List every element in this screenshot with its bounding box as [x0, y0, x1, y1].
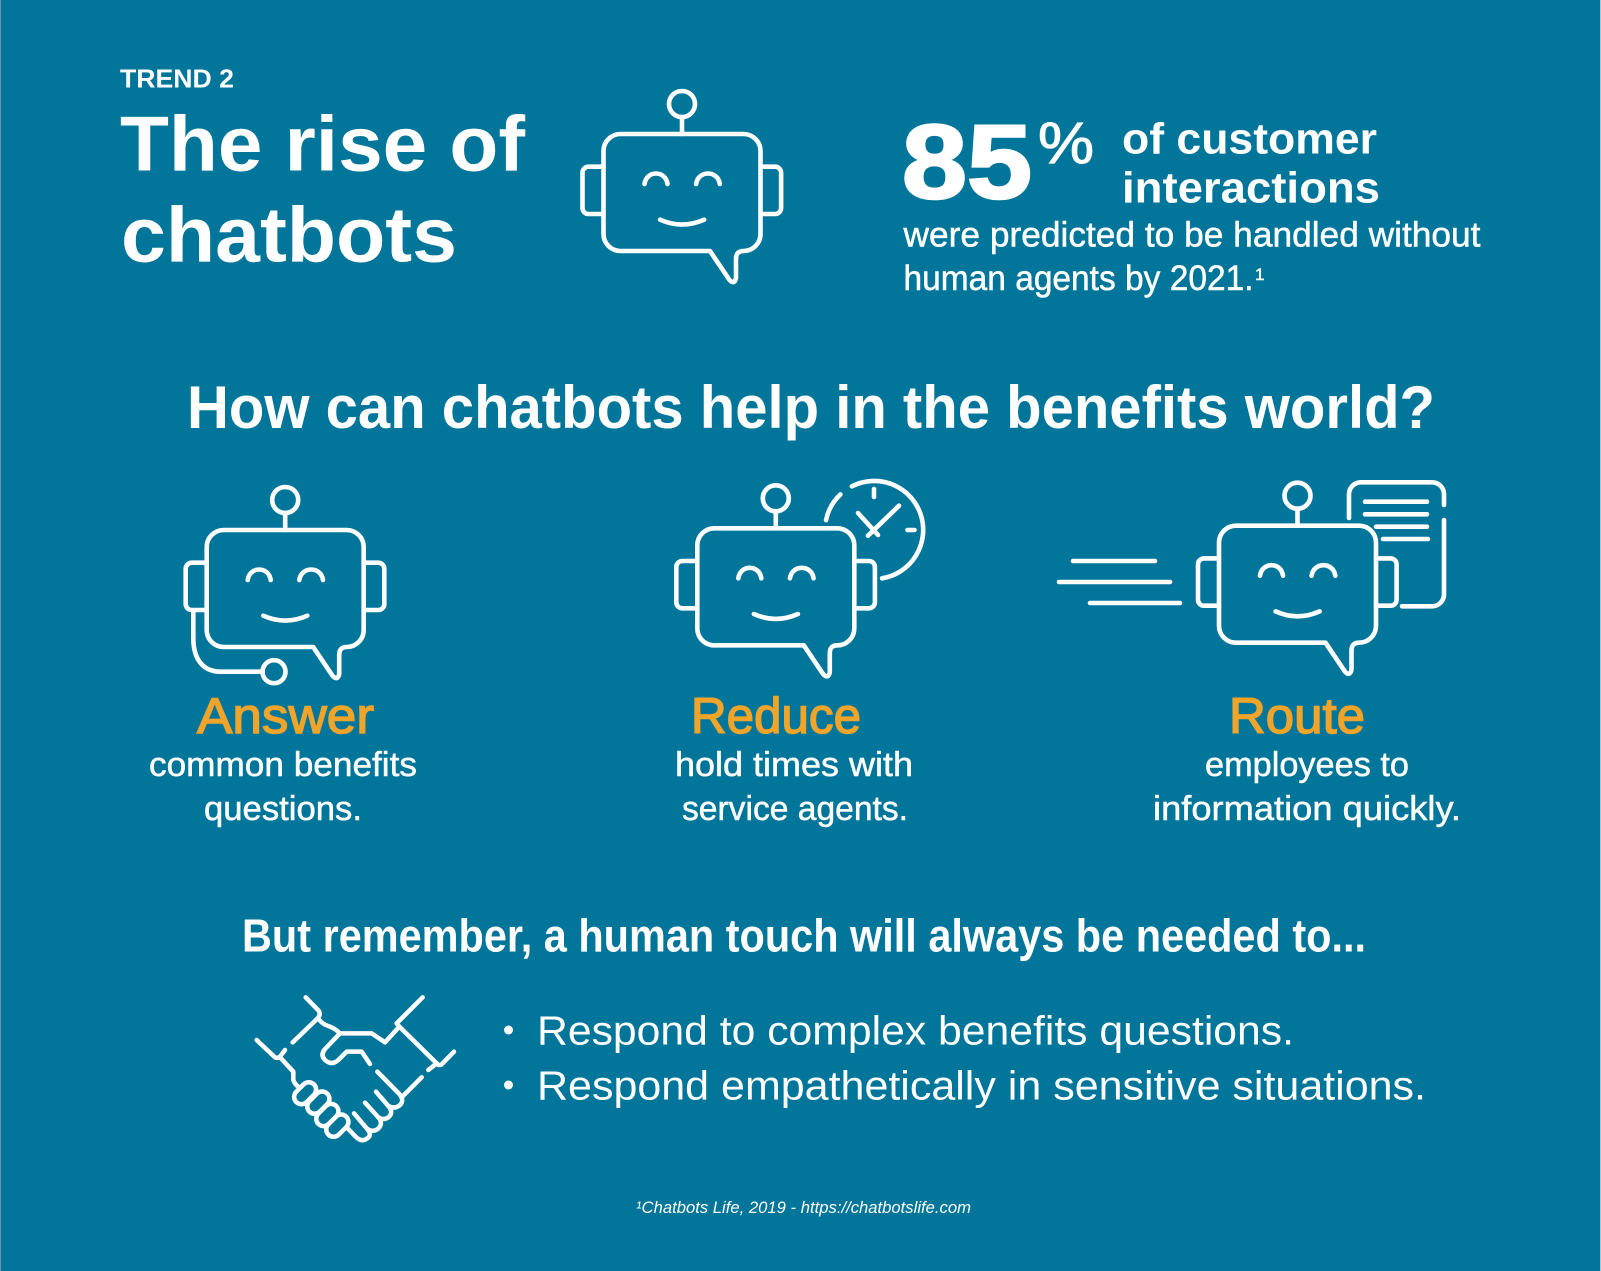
- icon: handshake: [257, 997, 454, 1140]
- stat: 85% of customer interactions: interactions: [1122, 164, 1380, 212]
- stat: 85% of customer interactions: %: [1038, 111, 1094, 176]
- stat description: human agents by 2021.: [904, 259, 1254, 298]
- text: common benefits questions: [149, 746, 417, 828]
- stat description: were predicted to be handled without: [902, 216, 1481, 254]
- label: Answer: Answer: [197, 688, 374, 744]
- subheading: human touch: But remember, a human touch will always be needed to...: [242, 910, 1366, 962]
- text: employees to information quickly: [1153, 746, 1461, 828]
- text: hold times with service agents: hold times with: [675, 746, 913, 784]
- text: employees to information quickly: information quickly.: [1153, 790, 1461, 828]
- stat description: 1: [1255, 265, 1264, 284]
- icon: chatbot with clock: [676, 481, 923, 676]
- text: employees to information quickly: employees to: [1205, 746, 1409, 784]
- label: Route: Route: [1229, 688, 1365, 744]
- footnote: ¹Chatbots Life, 2019 - https://chatbotslife.com: [636, 1199, 971, 1217]
- bullet list: Respond empathetically in sensitive situations.: [537, 1062, 1426, 1108]
- text: common benefits questions: common benefits: [149, 746, 417, 784]
- title: The rise of: [120, 100, 526, 188]
- icon: chatbot with headset: [186, 487, 384, 683]
- text: common benefits questions: questions.: [204, 790, 362, 828]
- stat: 85% of customer interactions: of customer: [1122, 114, 1377, 164]
- text: hold times with service agents: service agents.: [682, 790, 908, 828]
- bullet list: Respond to complex benefits questions.: [537, 1008, 1294, 1054]
- stat: 85% of customer interactions: 85: [902, 104, 1032, 221]
- bullet list: [504, 1008, 1426, 1108]
- icon: chatbot with document and speed lines: [1059, 482, 1444, 674]
- text: hold times with service agents: [675, 746, 913, 828]
- stat description: [902, 216, 1481, 298]
- title: chatbots: [121, 190, 457, 278]
- label: Reduce: Reduce: [691, 688, 861, 744]
- heading: How can chatbots help in the benefits world?: [187, 374, 1435, 441]
- eyebrow: TREND 2: TREND 2: [120, 64, 234, 94]
- icon: chatbot: [582, 91, 781, 282]
- stat: 85% of customer interactions: [902, 104, 1380, 221]
- title: [120, 100, 526, 278]
